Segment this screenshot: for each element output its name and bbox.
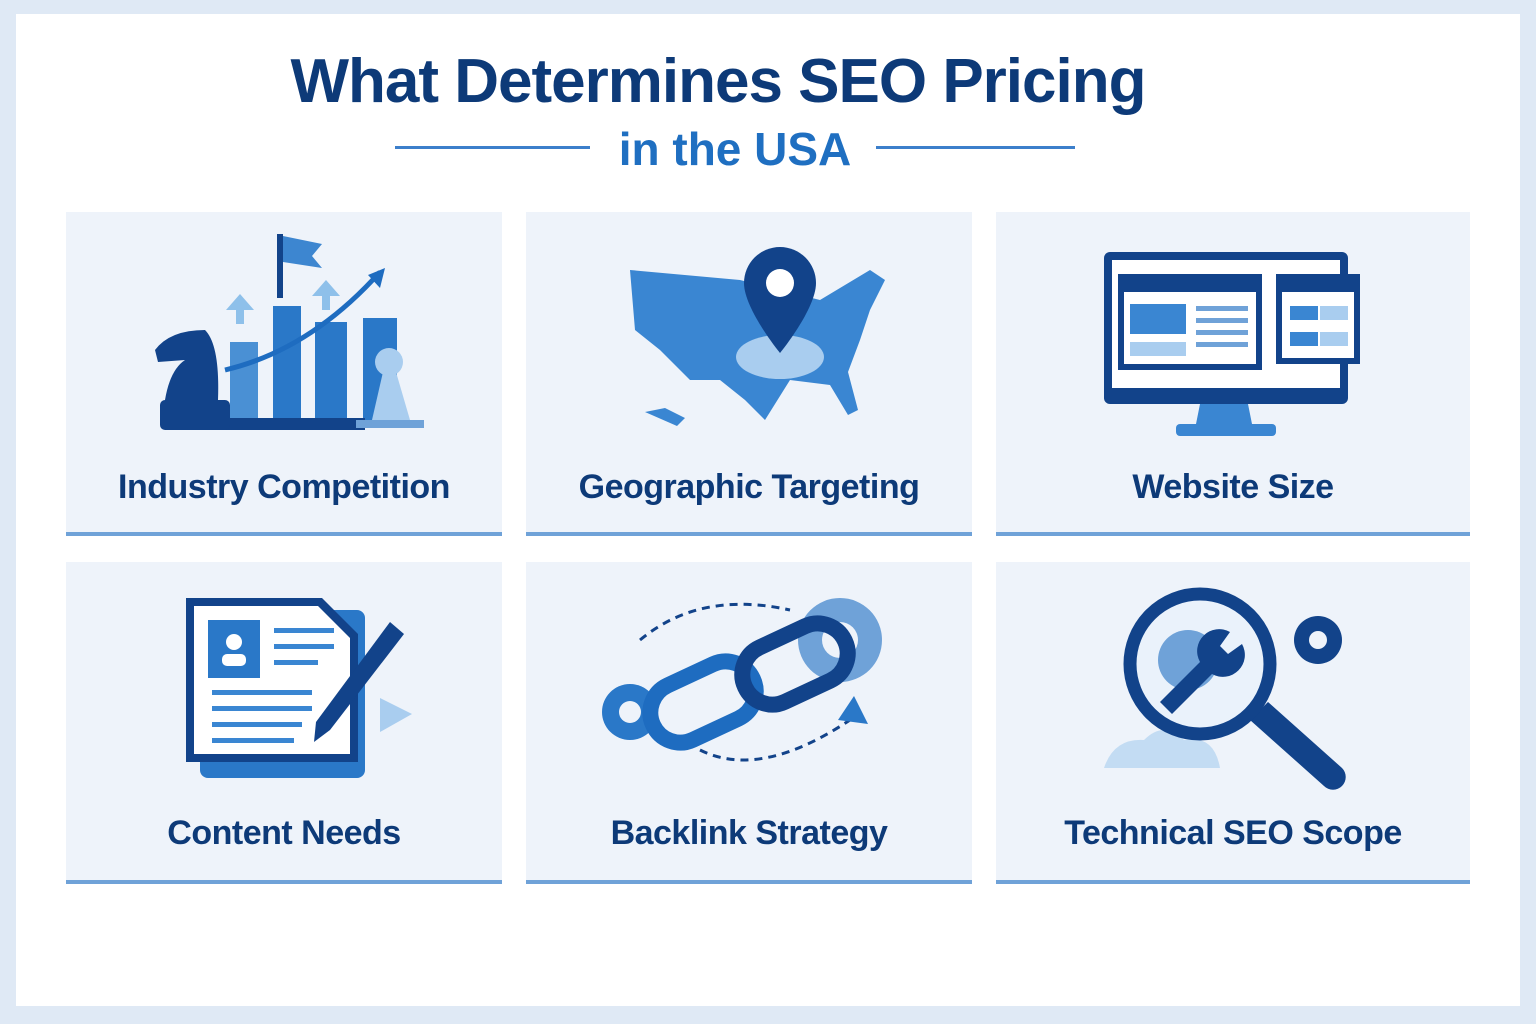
panel: backlink strategy (526, 562, 972, 884)
icon: usa map pin (630, 247, 885, 426)
title: What Determines SEO Pricing (290, 47, 1146, 116)
panel: technical seo scope (996, 562, 1470, 884)
icon: document pencil (186, 598, 412, 778)
label: Technical SEO Scope (1064, 814, 1402, 852)
panel: geographic targeting (526, 212, 972, 536)
icon: chess chart (155, 234, 424, 430)
subtitle: in the USA (619, 123, 851, 175)
label: Geographic Targeting (579, 468, 919, 506)
label: Backlink Strategy (611, 814, 887, 852)
panel: industry competition (66, 212, 502, 536)
panel: website size (996, 212, 1470, 536)
icon: magnifier wrench (1104, 588, 1346, 790)
label: Content Needs (167, 814, 401, 852)
panel: content needs (66, 562, 502, 884)
label: Website Size (1132, 468, 1334, 506)
icon: chain link gears (602, 598, 882, 762)
label: Industry Competition (118, 468, 450, 506)
icon: monitor (1104, 252, 1360, 436)
